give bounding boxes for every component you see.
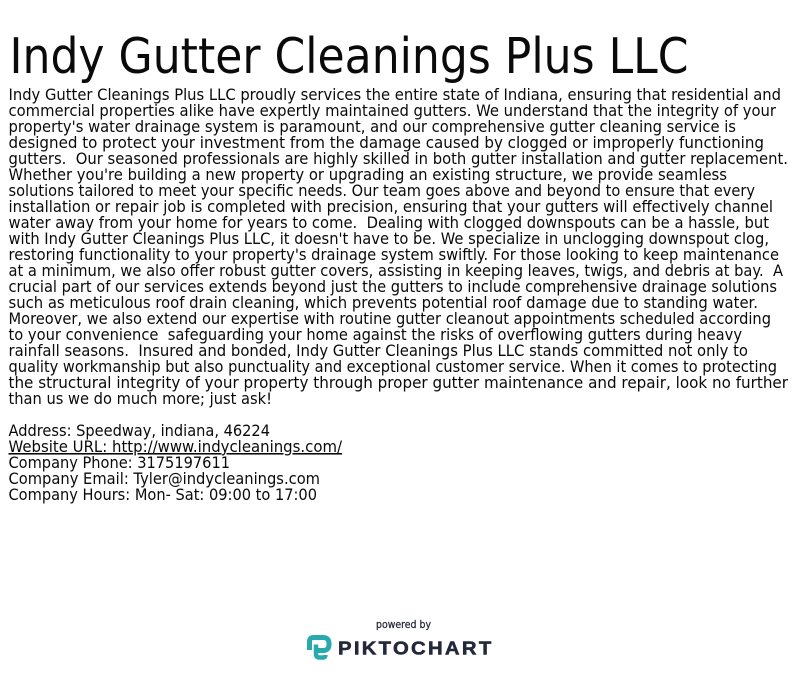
icon: Piktochart logo mark bbox=[310, 638, 329, 658]
text block: company description: than us we do much more; just ask! bbox=[8, 389, 272, 408]
text block: company description: the structural integrity of your property through proper gutter maintenance and repair, look no further bbox=[8, 373, 789, 392]
text block: contact details: Company Email: Tyler@indycleanings.com bbox=[8, 469, 320, 488]
text block: company description: solutions tailored to meet your specific needs. Our team goes above and beyond to ensure that every bbox=[8, 181, 755, 200]
text block: contact details: Company Phone: 3175197611 bbox=[8, 453, 230, 472]
text block: company description: rainfall seasons. Insured and bonded, Indy Gutter Cleanings Plus LLC stands committed not only to bbox=[8, 341, 748, 360]
text block: contact details: Website URL: http://www.indycleanings.com/ bbox=[8, 437, 343, 456]
text block: company description: to your convenience safeguarding your home against the risks of overflowing gutters during heavy bbox=[8, 325, 742, 344]
text block: company description bbox=[8, 85, 789, 408]
Piktochart wordmark: PIKTOCHART bbox=[338, 638, 494, 658]
text block: company description: with Indy Gutter Cleanings Plus LLC, it doesn't have to be. We specialize in unclogging downspout clog, bbox=[8, 229, 769, 248]
text block: contact details: Address: Speedway, indiana, 46224 bbox=[8, 421, 270, 440]
powered by caption: powered by bbox=[376, 619, 431, 631]
text block: contact details bbox=[8, 421, 343, 504]
text block: company description: commercial properties alike have expertly maintained gutters. We understand that the integrity of your bbox=[8, 101, 777, 120]
text block: company description: such as meticulous roof drain cleaning, which prevents potential roof damage due to standing water. bbox=[8, 293, 758, 312]
text block: company description: designed to protect your investment from the damage caused by clogged or improperly functioning bbox=[8, 133, 764, 152]
title: Indy Gutter Cleanings Plus LLC bbox=[10, 28, 688, 85]
text block: company description: water away from your home for years to come. Dealing with clogged downspouts can be a hassle, but bbox=[8, 213, 769, 232]
text block: company description: Whether you're building a new property or upgrading an existing structure, we provide seamless bbox=[8, 165, 727, 184]
text block: company description: property's water drainage system is paramount, and our comprehensive gutter cleaning service is bbox=[8, 117, 736, 136]
text block: contact details: Company Hours: Mon- Sat: 09:00 to 17:00 bbox=[8, 485, 317, 504]
text block: company description: installation or repair job is completed with precision, ensuring that your gutters will effectively channel bbox=[8, 197, 773, 216]
